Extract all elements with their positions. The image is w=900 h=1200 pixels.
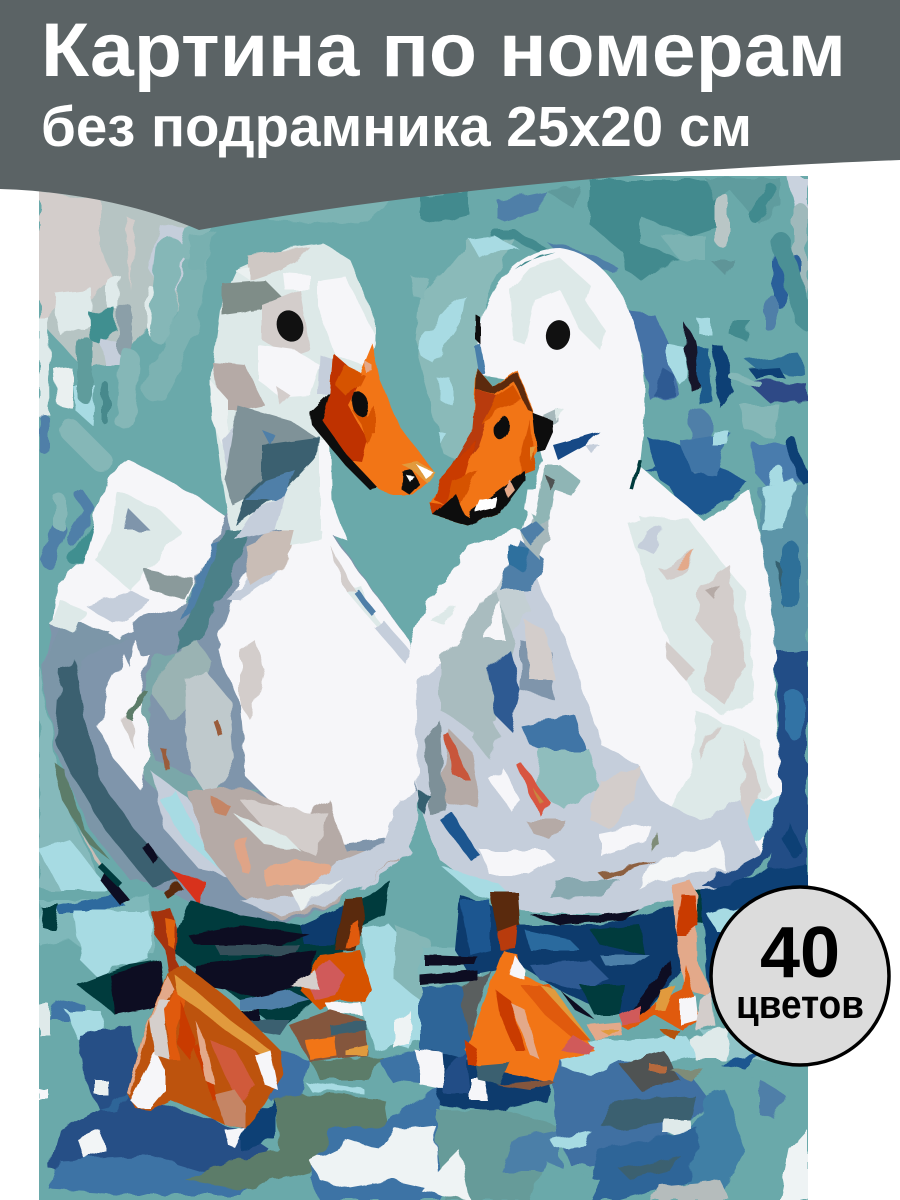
foot: right goose rear [587,880,715,1040]
right goose lower wing [410,530,520,673]
right goose [410,248,795,915]
dark water and webbed feet [77,865,715,1148]
right goose head and neck [476,248,645,545]
right goose body [410,460,795,915]
left goose head and neck [210,243,375,545]
dark water under left goose [77,865,390,1035]
left goose eye [276,310,304,342]
left goose beak [310,343,435,495]
title: Картина по номерам [41,8,846,93]
left goose body [42,450,422,925]
header banner [0,0,900,230]
painting background: lower water [39,865,808,1200]
right goose eye [546,320,570,350]
foot: left goose front [127,908,283,1148]
badge label: цветов [736,983,864,1027]
right-side water [640,180,720,235]
aqua wash between the geese [415,240,515,470]
right goose pale wash [627,515,755,715]
painting background: left margin [39,495,110,900]
dark water under right goose [420,895,690,1020]
sky patches above the geese [420,192,470,222]
left goose [42,243,435,925]
left goose wing [52,460,226,637]
badge: 40 colours [711,887,889,1065]
painting background: upper water [39,176,808,880]
subtitle: без подрамника 25х20 см [41,95,752,159]
painting: two white geese on teal water [39,176,808,1200]
foot: left goose rear [289,897,372,1062]
right goose beak [430,368,553,525]
left goose belly [217,531,418,845]
badge number: 40 [760,913,840,993]
left goose lower shading [189,785,400,920]
right goose shaded flank [416,570,760,915]
foot: right goose front [465,892,596,1090]
